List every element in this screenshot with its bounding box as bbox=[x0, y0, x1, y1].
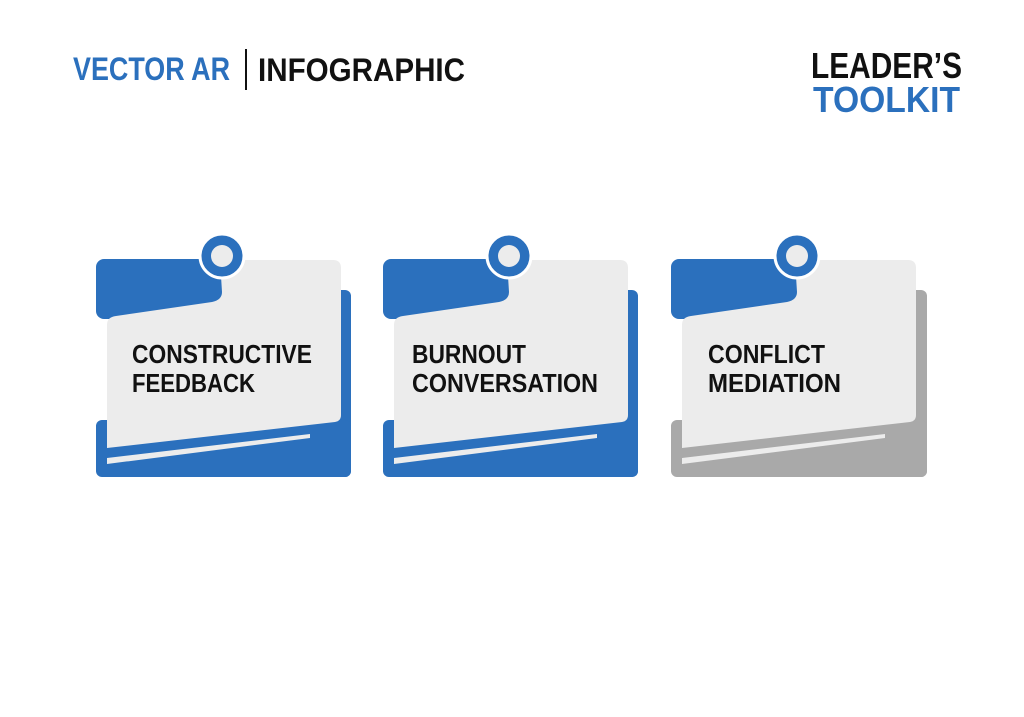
header: leader's toolkit: LEADER’S bbox=[811, 45, 962, 86]
card: conflict mediation bbox=[671, 234, 927, 477]
card: constructive feedback: CONSTRUCTIVE bbox=[132, 339, 312, 369]
card: constructive feedback: FEEDBACK bbox=[132, 368, 255, 398]
card: burnout conversation bbox=[383, 234, 638, 477]
card: conflict mediation: MEDIATION bbox=[708, 368, 841, 398]
brand text: VECTOR AR: VECTOR AR bbox=[73, 51, 230, 87]
card: burnout conversation: BURNOUT bbox=[412, 339, 526, 369]
card: burnout conversation: CONVERSATION bbox=[412, 368, 598, 398]
brand text: INFOGRAPHIC: INFOGRAPHIC bbox=[258, 52, 465, 88]
header: leader's toolkit bbox=[811, 45, 962, 120]
card: constructive feedback bbox=[96, 234, 351, 477]
divider bar bbox=[245, 49, 247, 90]
card: conflict mediation: CONFLICT bbox=[708, 339, 825, 369]
header: brand bbox=[73, 49, 465, 90]
header: leader's toolkit: TOOLKIT bbox=[813, 79, 960, 120]
